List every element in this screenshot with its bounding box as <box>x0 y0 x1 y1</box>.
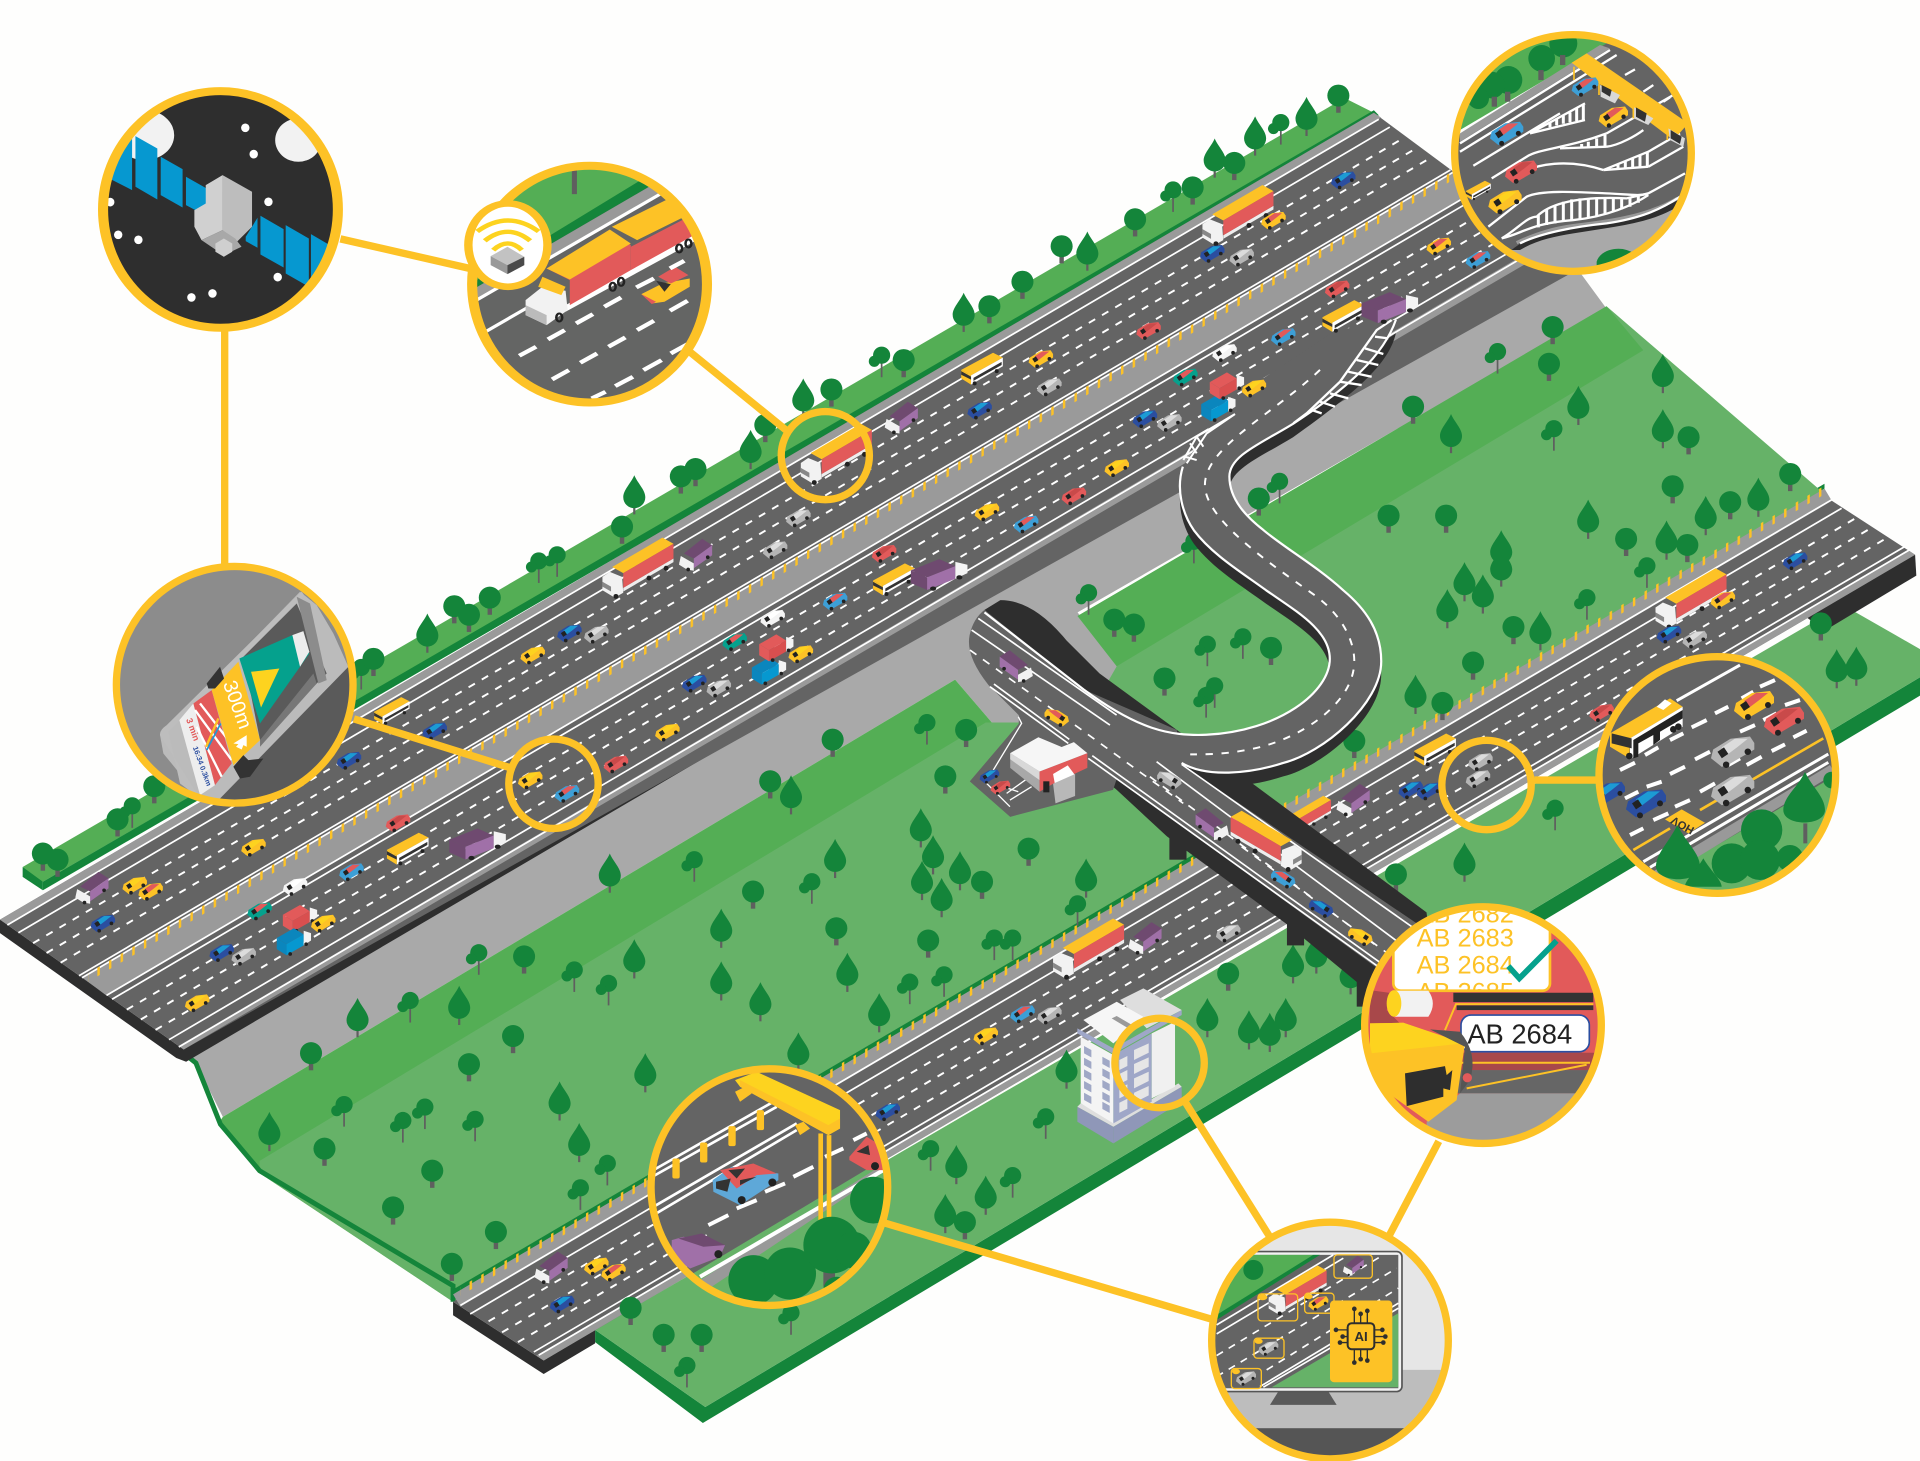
roadside office building <box>1077 988 1182 1143</box>
licence plate <box>1461 1015 1589 1052</box>
recognised plate list: AB 2684 <box>1417 952 1514 980</box>
right green field <box>1078 306 1827 851</box>
vehicles: lower highway <box>534 552 1807 1313</box>
licence plate: AB 2684 <box>1467 1018 1572 1049</box>
ramp merge zebra <box>1183 320 1392 463</box>
loop ramp and flyover <box>969 320 1430 1007</box>
AI chip panel <box>1330 1301 1392 1382</box>
trees: far verge <box>32 85 1349 877</box>
recognised plate list: AB 2682 <box>1417 901 1514 929</box>
callout: AI monitor <box>1208 1218 1452 1461</box>
trees: left field <box>258 714 1097 1281</box>
trees: right field <box>1076 316 1801 758</box>
service building on flyover plaza <box>980 737 1087 803</box>
vehicles: flyover <box>1000 650 1373 946</box>
trip time label: 3 min <box>184 717 202 742</box>
trees: lower-right field <box>620 612 1867 1387</box>
flyover deck <box>969 610 1417 967</box>
AI chip panel: AI <box>1354 1329 1368 1344</box>
callout: toll plaza <box>1451 31 1695 275</box>
ramp deck <box>1102 320 1396 773</box>
lower highway <box>453 489 1916 1374</box>
ramp edge lines <box>984 320 1396 773</box>
lower highway guard posts <box>460 485 1826 1296</box>
callout: in-car navigation phone <box>112 562 357 807</box>
lower-right green field <box>595 605 1920 1423</box>
distance label: 300m <box>218 678 256 732</box>
upper highway median posts <box>88 171 1453 982</box>
recognised plate list: AB 2685 <box>1417 979 1514 1007</box>
vehicles: upper highway, near carriageway <box>185 238 1490 1012</box>
small highlight rings on the scene <box>509 412 1531 1108</box>
icon: wifi sensor badge <box>468 203 547 287</box>
trip details label: 16:34 0.3km <box>191 745 214 788</box>
callout: HOV lane <box>1595 653 1840 897</box>
callout: satellite <box>90 83 351 337</box>
connector lines between callouts <box>225 239 1599 1320</box>
flyover lane lines and zebra <box>970 618 1417 967</box>
far-side green verge <box>23 98 1379 890</box>
recognised plate list: AB 2683 <box>1417 925 1514 953</box>
vehicles: upper highway, far carriageway <box>75 172 1356 933</box>
callout: licence plate recognition <box>1361 903 1605 1148</box>
callout: overhead gantry <box>640 1060 900 1313</box>
HOV lane marking: HOV <box>1669 813 1696 836</box>
recognised plate list <box>1416 910 1513 990</box>
upper highway <box>0 113 1582 1062</box>
left green field <box>184 484 1824 1302</box>
callout: truck with connected sensor <box>460 157 721 410</box>
grey embankment <box>181 257 1607 1117</box>
